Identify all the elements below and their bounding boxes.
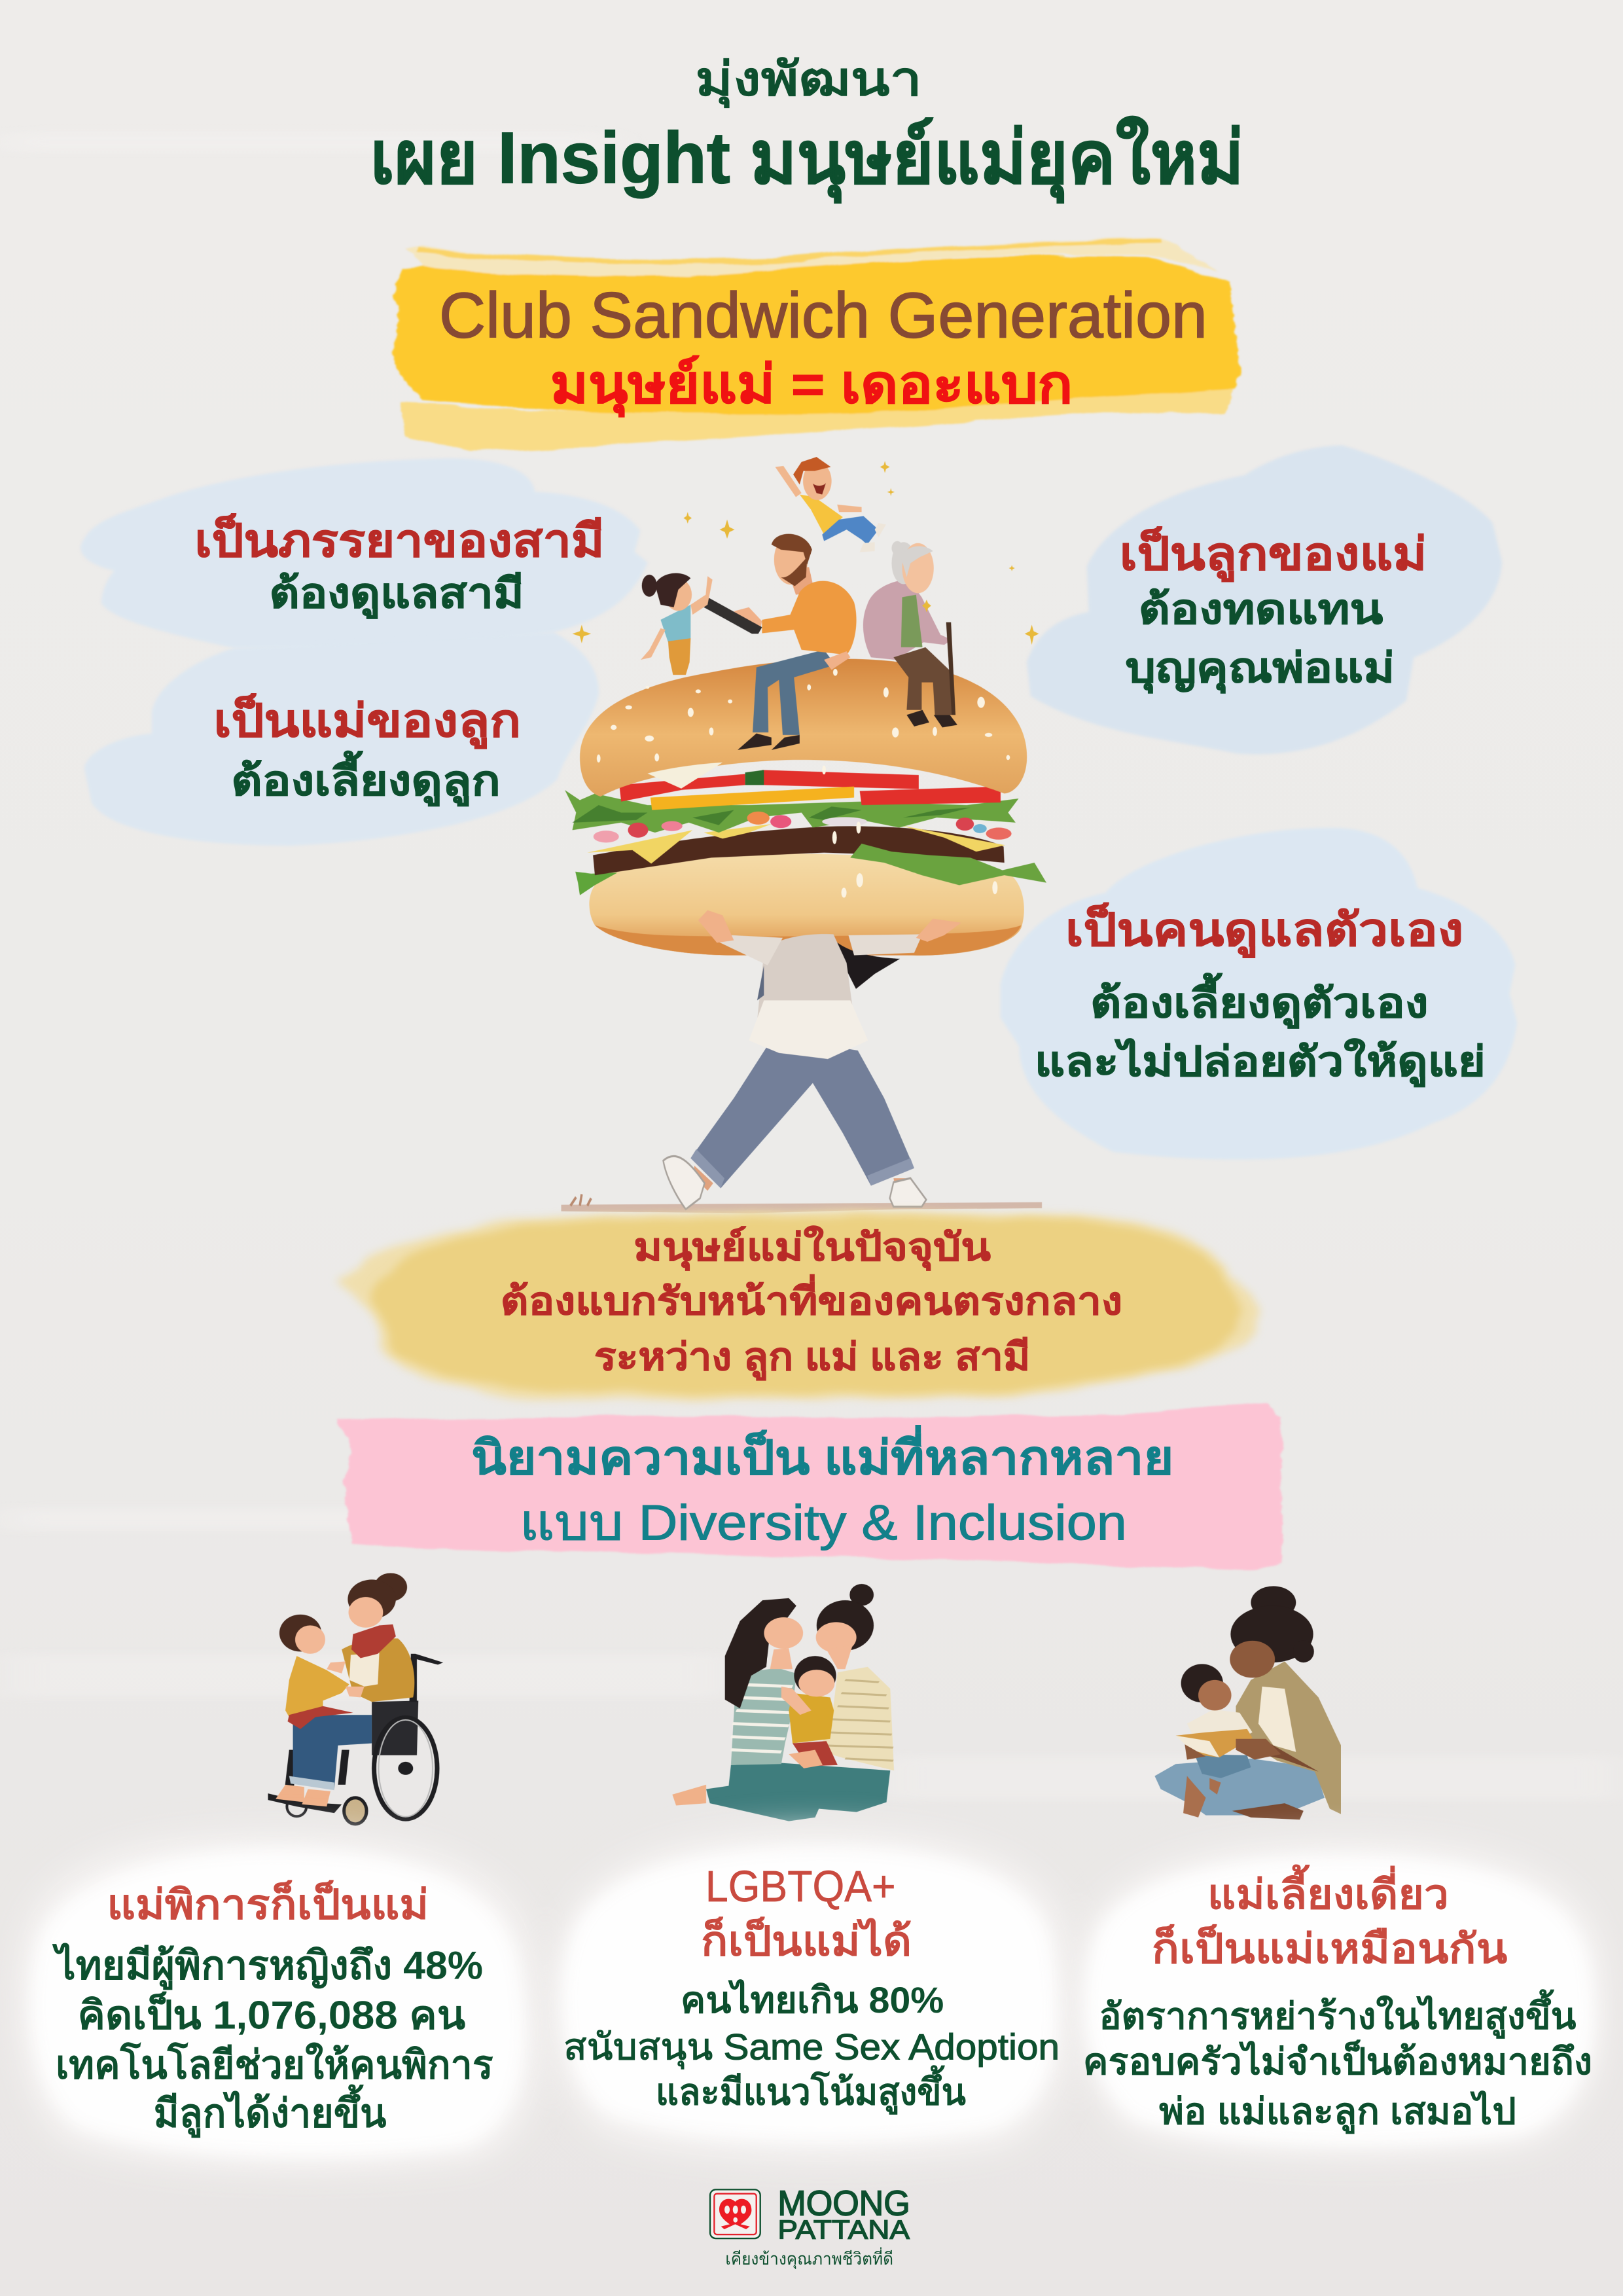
heading line 1: แม่เลี้ยงเดี่ยว [1207, 1864, 1449, 1918]
wheelchair [268, 1654, 443, 1824]
role title: เป็นภรรยาของสามี [194, 514, 605, 566]
body line 3: พ่อ แม่และลูก เสมอไป [1159, 2090, 1516, 2134]
gold brush shape [336, 1211, 1258, 1399]
banner title: Club Sandwich Generation [439, 279, 1207, 351]
banner brush strokes [392, 238, 1241, 452]
illustration: same-sex couple with child [672, 1584, 894, 1821]
illustrations: three mothers [268, 1573, 1341, 1824]
tomato slices and yellow pepper [619, 770, 1001, 805]
role title: เป็นคนดูแลตัวเอง [1065, 903, 1463, 959]
left lettuce [575, 872, 617, 895]
heading [370, 53, 1244, 204]
role description line 2: และไม่ปล่อยตัวให้ดูแย่ [1035, 1038, 1486, 1088]
woman: torso and sleeves [715, 934, 923, 1059]
heading: main title: เผย Insight มนุษย์แม่ยุคใหม่ [370, 117, 1244, 204]
role description line 1: ต้องเลี้ยงดูตัวเอง [1090, 973, 1429, 1029]
panel: single mothers [1075, 1839, 1608, 2159]
mother body [293, 1715, 372, 1789]
white brush blob [1075, 1839, 1608, 2159]
logo wordmark line 2: PATTANA [777, 2215, 910, 2245]
lettuce band [565, 790, 1018, 833]
heading line 2: ก็เป็นแม่เหมือนกัน [1152, 1924, 1508, 1972]
role description: ต้องเลี้ยงดูลูก [231, 750, 501, 806]
left mother head and hair [725, 1598, 796, 1708]
mother jacket and top [1236, 1661, 1341, 1814]
sandwich [565, 659, 1046, 956]
panel: diversity banner [336, 1404, 1282, 1570]
patty [593, 826, 1005, 875]
logo: Moong Pattana [710, 2183, 910, 2269]
statistic line 1: ไทยมีผู้พิการหญิงถึง 48% [52, 1942, 483, 1990]
pink brush shape [336, 1404, 1282, 1570]
mother head and curly hair [1251, 1586, 1296, 1619]
banner subtitle: มนุษย์แม่ = เดอะแบก [550, 355, 1073, 418]
seated legs [706, 1763, 890, 1821]
child [285, 1656, 349, 1717]
cheese [587, 824, 1005, 864]
panel: Club Sandwich Generation banner [392, 238, 1241, 452]
right mother head and hair [849, 1584, 874, 1605]
role description: ต้องดูแลสามี [269, 571, 524, 619]
panel: gold caption on modern mothers [336, 1211, 1258, 1399]
cloud shape [84, 632, 599, 846]
ground shadow [561, 1202, 1042, 1213]
grandmother sitting with cane [863, 541, 957, 727]
caption line 3: ระหว่าง ลูก แม่ และ สามี [594, 1336, 1030, 1380]
role description line 1: ต้องทดแทน [1139, 587, 1383, 633]
woman: hands [698, 910, 961, 942]
sparkle stars [573, 461, 1039, 645]
body line 3: เทคโนโลยีช่วยให้คนพิการ [56, 2041, 493, 2087]
panel: wife role cloud [80, 458, 648, 648]
child [1187, 1710, 1253, 1741]
body line 1: อัตราการหย่าร้างในไทยสูงขึ้น [1099, 1989, 1576, 2039]
panel: daughter role cloud [1027, 445, 1502, 754]
role title: เป็นลูกของแม่ [1120, 527, 1427, 583]
statistic line 2: สนับสนุน Same Sex Adoption [563, 2026, 1060, 2069]
logo tagline: เคียงข้างคุณภาพชีวิตที่ดี [725, 2247, 893, 2269]
open book [1176, 1729, 1253, 1757]
heading: brand line: มุ่งพัฒนา [695, 53, 922, 108]
caption line 2: ต้องแบกรับหน้าที่ของคนตรงกลาง [501, 1274, 1122, 1323]
top bun [580, 659, 1027, 797]
body line 4: มีลูกได้ง่ายขึ้น [154, 2084, 386, 2138]
banner line 2: แบบ Diversity & Inclusion [520, 1496, 1127, 1551]
panel: LGBTQA+ mothers [550, 1829, 1073, 2162]
logo wordmark line 1: MOONG [777, 2183, 910, 2223]
panel: disabled mothers [15, 1833, 543, 2173]
illustration: woman carrying giant sandwich with family on top [561, 457, 1046, 1213]
child [789, 1693, 834, 1743]
illustration: mother in wheelchair with child [268, 1573, 443, 1824]
statistic line 2: คิดเป็น 1,076,088 คน [78, 1991, 465, 2037]
heading: แม่พิการก็เป็นแม่ [107, 1880, 429, 1928]
seated legs [1154, 1759, 1325, 1815]
statistic line 1: คนไทยเกิน 80% [681, 1979, 944, 2020]
woman: legs [663, 1043, 926, 1210]
illustration: single mother reading with child [1154, 1586, 1341, 1820]
cloud shape [1027, 445, 1502, 754]
caption line 1: มนุษย์แม่ในปัจจุบัน [633, 1225, 991, 1271]
sesame seeds [597, 669, 1010, 898]
body line 2: ครอบครัวไม่จำเป็นต้องหมายถึง [1083, 2039, 1592, 2082]
panel: self-care role cloud [1001, 828, 1517, 1160]
heading line 2: ก็เป็นแม่ได้ [701, 1917, 912, 1965]
heading line 1: LGBTQA+ [705, 1862, 896, 1911]
white brush blob [15, 1833, 543, 2173]
panel: mother role cloud [84, 632, 599, 846]
right lettuce over bottom bun [850, 844, 1046, 885]
striped tops [731, 1668, 796, 1765]
role description line 2: บุญคุณพ่อแม่ [1126, 645, 1395, 693]
logo icon [710, 2189, 760, 2238]
white brush blob [550, 1829, 1073, 2162]
veggie bits [594, 812, 1012, 842]
statistic line 3: และมีแนวโน้มสูงขึ้น [656, 2066, 966, 2115]
role title: เป็นแม่ของลูก [213, 694, 521, 749]
cloud shape [80, 458, 648, 648]
man sitting with tablet [704, 534, 857, 750]
banner line 1: นิยามความเป็น แม่ที่หลากหลาย [471, 1425, 1173, 1484]
woman: long hair [828, 934, 900, 989]
boy jumping [776, 457, 886, 552]
girl reaching up [641, 573, 713, 675]
bottom bun [589, 853, 1024, 956]
cloud shape [1001, 828, 1517, 1160]
